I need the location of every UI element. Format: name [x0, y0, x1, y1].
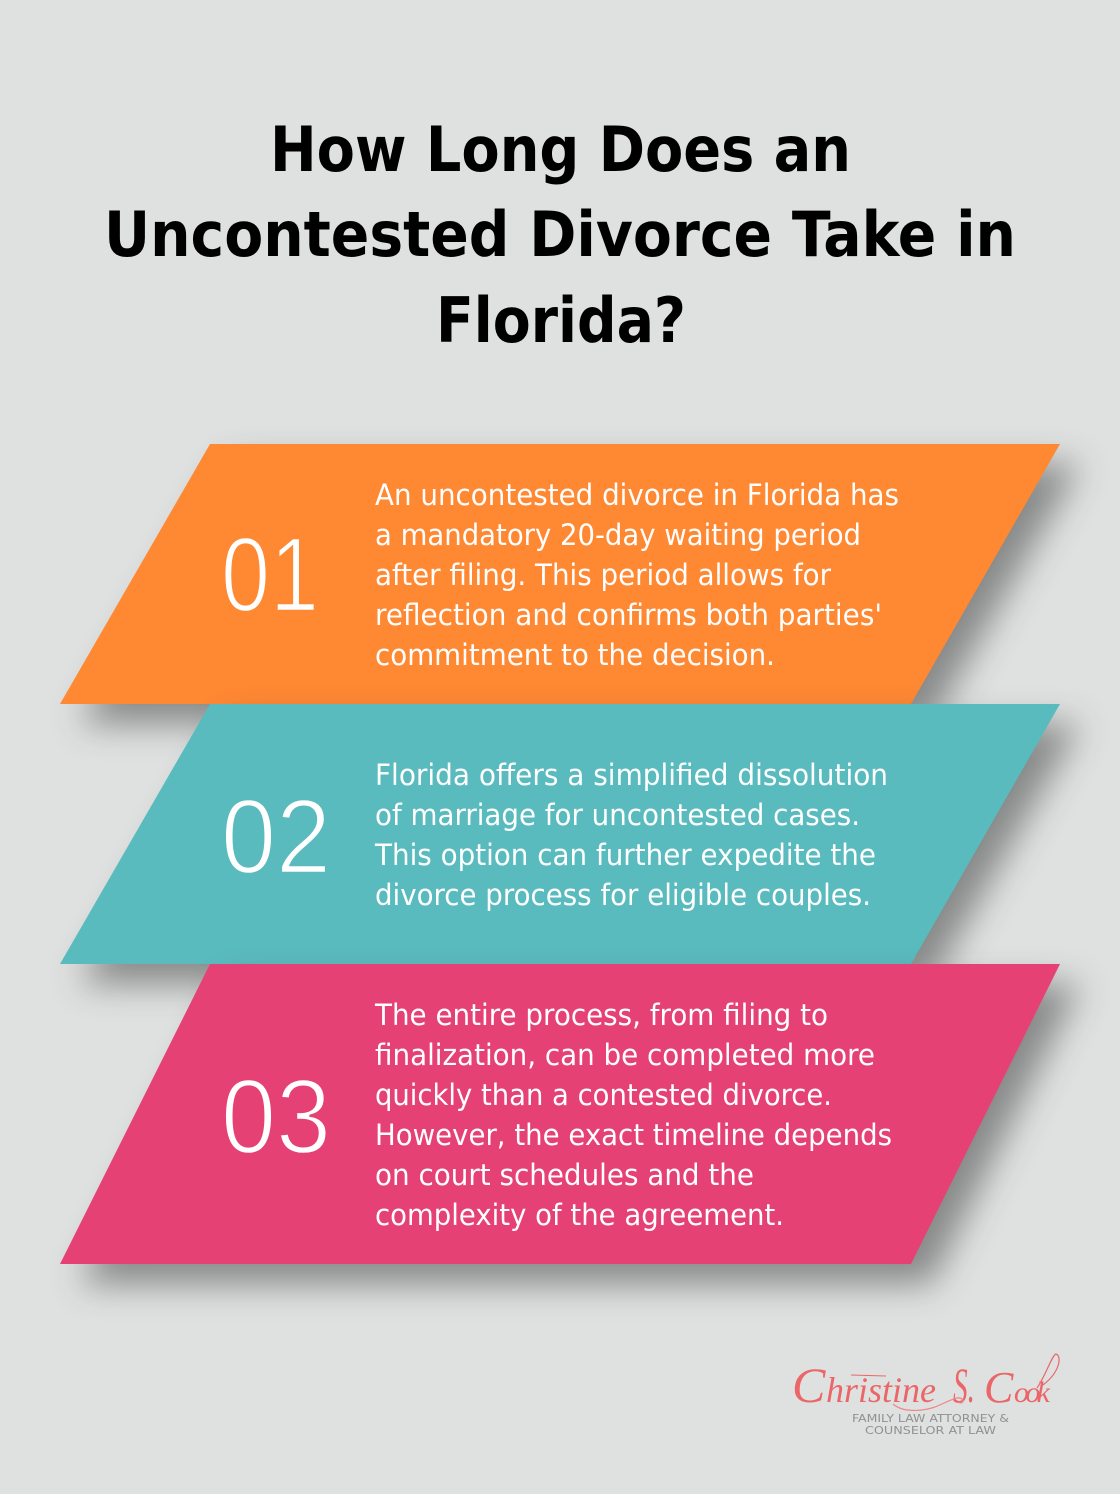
text block: step 02: Florida offers a simplified dissolution [375, 758, 888, 792]
text block: step 01: An uncontested divorce in Florida has [375, 478, 899, 512]
logo: Christine S. Cook [792, 1354, 1059, 1437]
logo: Christine S. Cook: C [984, 1363, 1014, 1412]
text block: step 03 [374, 998, 892, 1232]
text block: step 03: The entire process, from filing to [374, 998, 828, 1032]
text block: step 01: a mandatory 20-day waiting period [375, 518, 861, 552]
text block: step 03: finalization, can be completed more [375, 1038, 875, 1072]
title: How Long Does an [270, 113, 851, 186]
title [104, 113, 1016, 357]
text block: step 03: complexity of the agreement. [375, 1198, 784, 1232]
logo: Christine S. Cook: FAMILY LAW ATTORNEY & [852, 1413, 1009, 1425]
text block: step 03: quickly than a contested divorce. [375, 1078, 832, 1112]
logo: Christine S. Cook: COUNSELOR AT LAW [865, 1425, 997, 1437]
text block: step 01: after filing. This period allows for [375, 558, 832, 592]
logo: Christine S. Cook: C [792, 1357, 826, 1413]
title: Florida? [436, 284, 686, 357]
text block: step 02: This option can further expedite the [374, 838, 876, 872]
text block: step 01: reflection and confirms both parties' [375, 598, 882, 632]
number 01: 01 [221, 516, 319, 634]
text block: step 02: divorce process for eligible couples. [375, 878, 871, 912]
text block: step 02: of marriage for uncontested cases. [375, 798, 860, 832]
logo: Christine S. Cook: ook [1014, 1376, 1051, 1409]
panel: step 01 [60, 444, 1080, 724]
text block: step 03: However, the exact timeline depends [375, 1118, 892, 1152]
panel: step 03 [60, 964, 1080, 1284]
text block: step 03: on court schedules and the [375, 1158, 754, 1192]
text block: step 02 [374, 758, 888, 912]
text block: step 01: commitment to the decision. [375, 638, 775, 672]
number 02: 02 [221, 778, 331, 896]
logo: Christine S. Cook: S. [953, 1357, 975, 1413]
number 03: 03 [221, 1058, 331, 1176]
text block: step 01 [375, 478, 899, 672]
logo: Christine S. Cook: hristine [826, 1370, 936, 1410]
panel: step 02 [60, 704, 1080, 984]
title: Uncontested Divorce Take in [104, 198, 1016, 271]
